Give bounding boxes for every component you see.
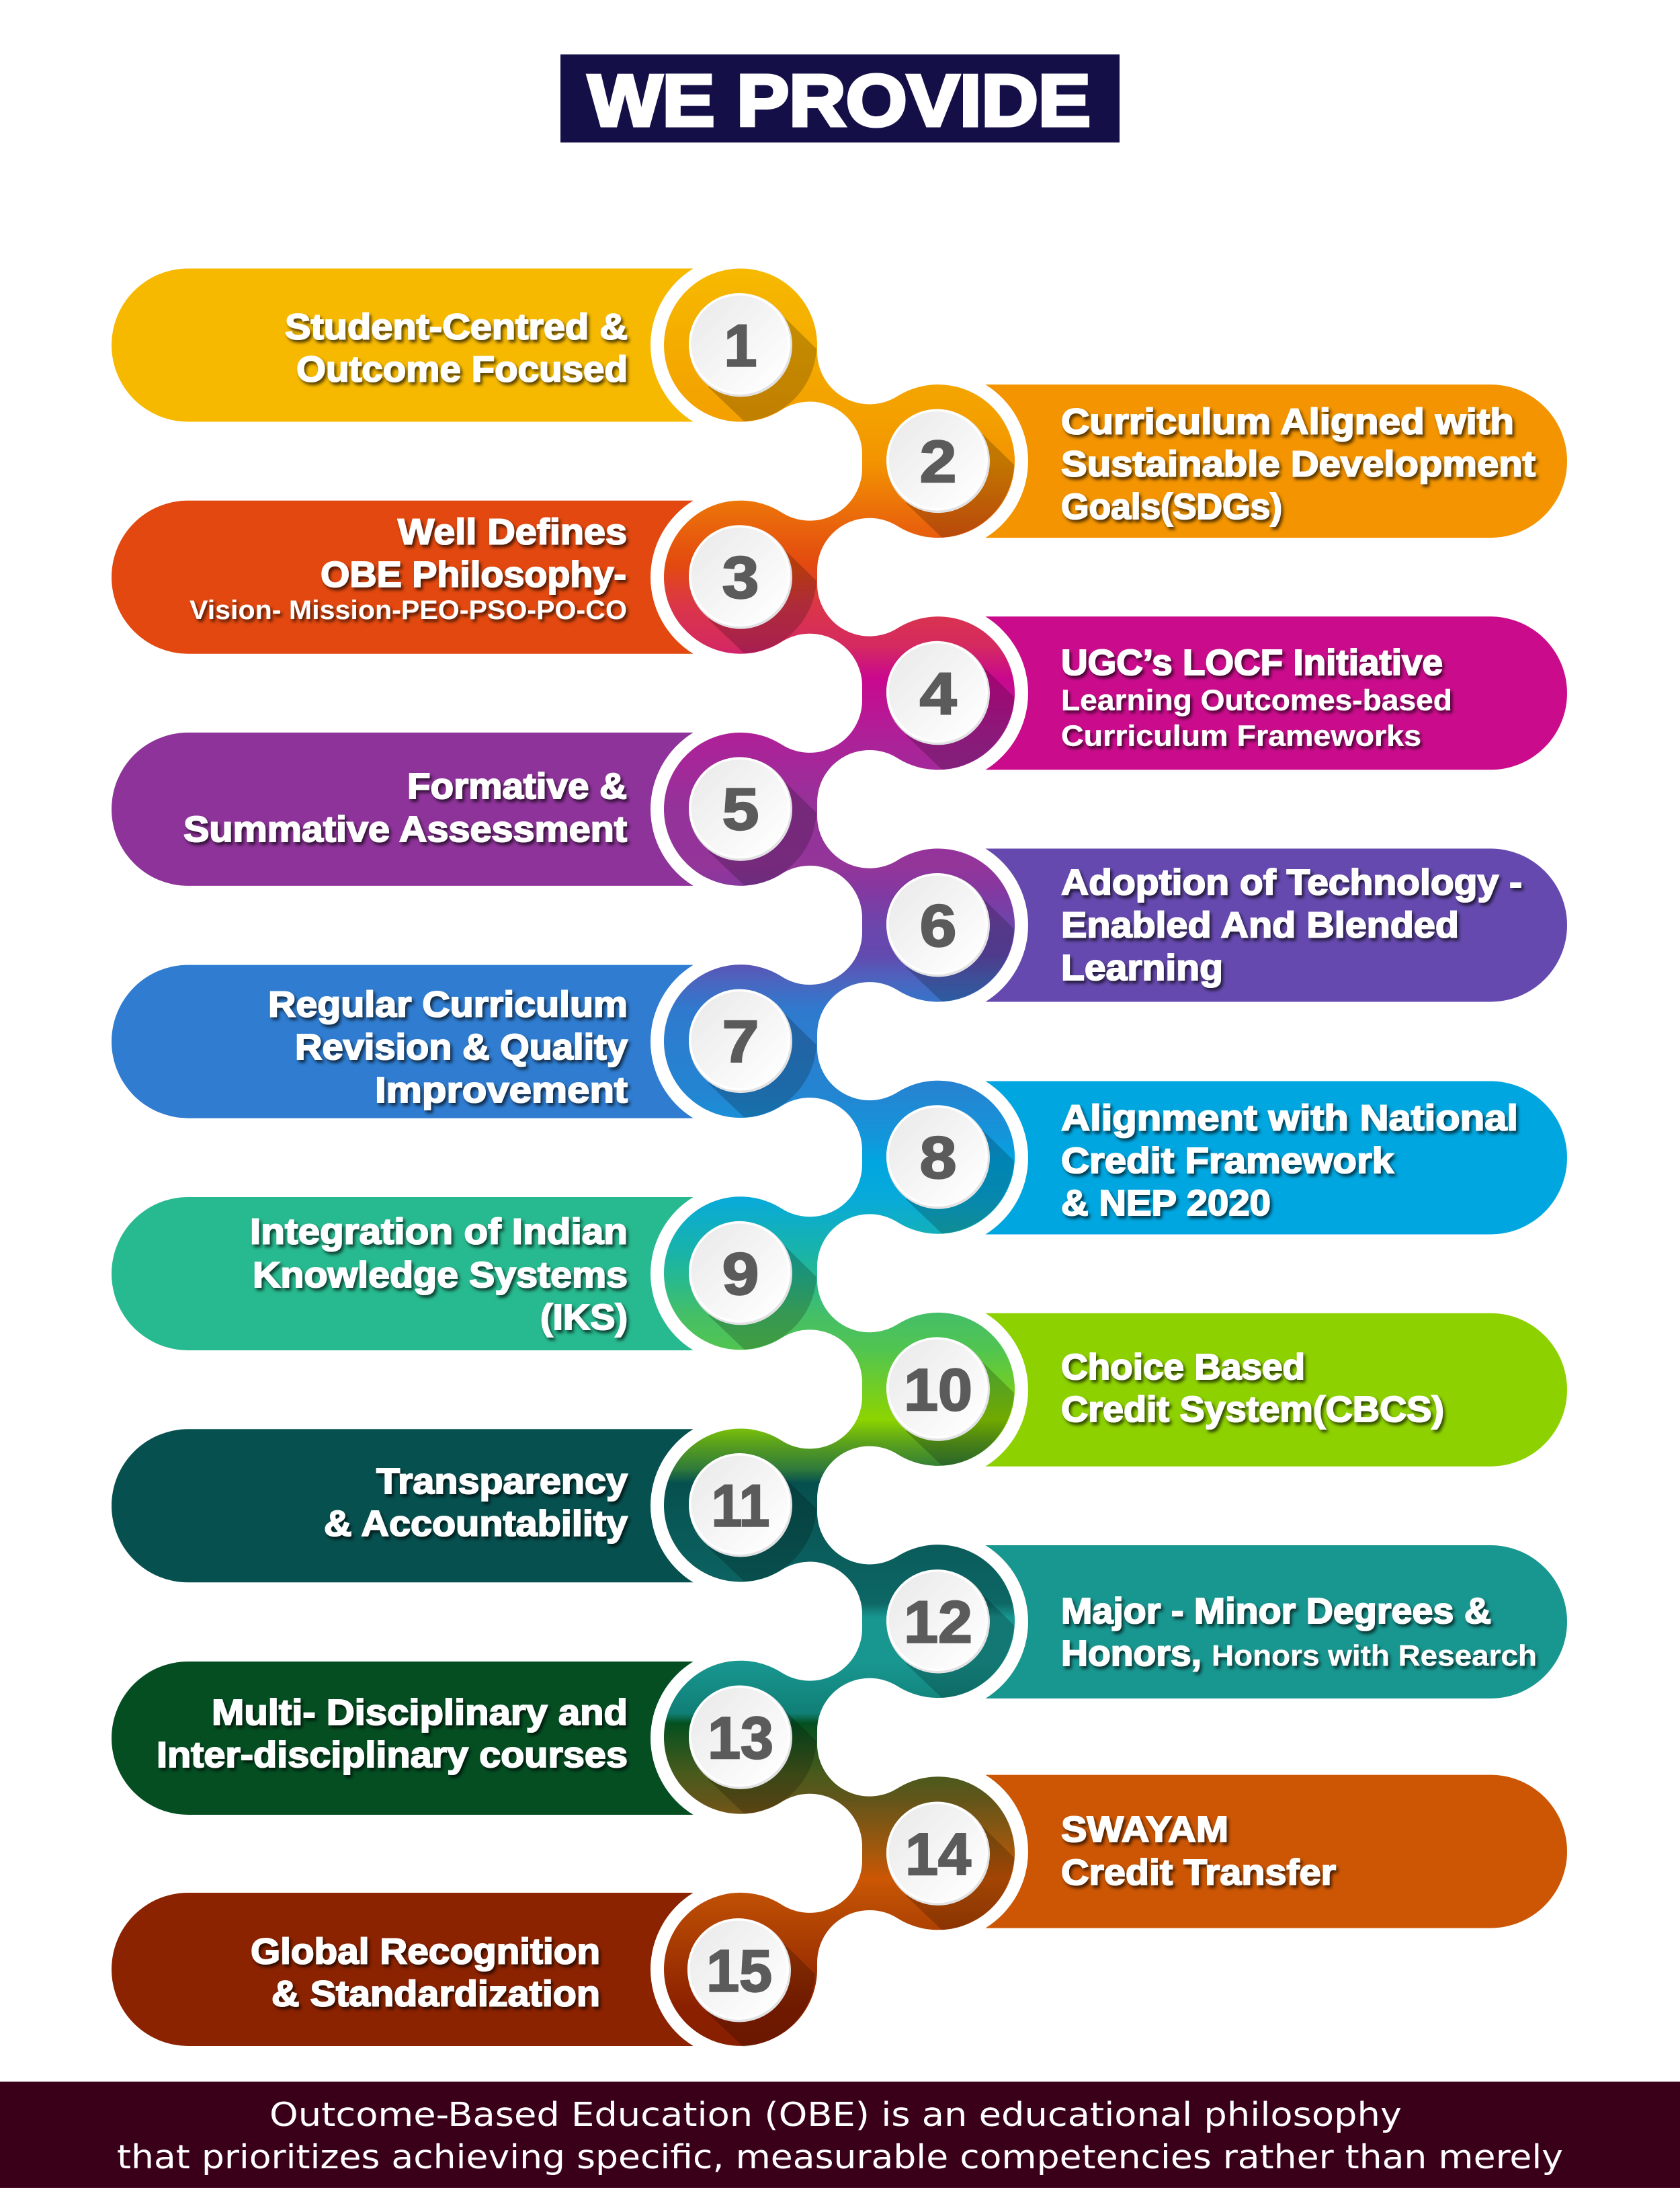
label 13: Multi- Disciplinary and: [212, 1692, 628, 1733]
item 15: [112, 1893, 815, 2047]
label 10: Choice Based: [1061, 1347, 1305, 1387]
badge 5: [689, 757, 816, 885]
label 8: & NEP 2020: [1061, 1183, 1271, 1223]
label 9: (IKS): [540, 1297, 628, 1338]
label 12: Major - Minor Degrees &: [1061, 1591, 1491, 1631]
badge 14: 14: [905, 1821, 971, 1887]
item 3: [112, 501, 816, 654]
label 1: Student-Centred &: [285, 306, 628, 347]
item 1: [112, 269, 816, 422]
label 9: Knowledge Systems: [253, 1255, 628, 1295]
badge 14: [886, 1801, 1014, 1930]
badge 8: [886, 1105, 1014, 1233]
badge 15: 15: [706, 1937, 772, 2004]
label 14: SWAYAM: [1061, 1809, 1228, 1850]
pill 10: [985, 1313, 1567, 1467]
footer banner: that prioritizes achieving specific, measurable competencies rather than merely: [117, 2138, 1563, 2176]
label 5: Formative &: [407, 766, 627, 807]
pill 9: [112, 1197, 694, 1350]
label 4: Learning Outcomes-based: [1061, 684, 1452, 716]
pill 2: [985, 384, 1567, 538]
label 3: [190, 512, 627, 625]
item 13: [112, 1662, 816, 1815]
footer banner: Outcome-Based Education (OBE) is an educational philosophy: [269, 2096, 1402, 2134]
label 15: [251, 1932, 600, 2014]
badge 4: 4: [920, 660, 956, 727]
label 2: Sustainable Development: [1061, 444, 1536, 484]
label 9: [250, 1211, 628, 1338]
badge 10: 10: [904, 1357, 972, 1424]
badge 9: [689, 1221, 816, 1350]
label 10: [1061, 1347, 1444, 1430]
label 2: [1061, 402, 1536, 527]
label 8: Alignment with National: [1061, 1098, 1518, 1139]
label 5: [183, 766, 627, 850]
label 7: Improvement: [375, 1070, 628, 1110]
label 5: Summative Assessment: [183, 809, 627, 850]
badge 11: [689, 1453, 816, 1582]
badge 6: [886, 873, 1014, 1001]
label 7: Regular Curriculum: [268, 984, 628, 1024]
label 6: [1061, 862, 1522, 988]
label 11: Transparency: [376, 1461, 628, 1502]
label 4: [1061, 643, 1452, 753]
pill 6: [985, 848, 1567, 1001]
label 12: Honors with Research: [1212, 1639, 1537, 1672]
pill 15: [112, 1893, 694, 2046]
pill 13: [112, 1662, 694, 1815]
item 7: [112, 965, 816, 1118]
label 6: Adoption of Technology -: [1061, 862, 1522, 903]
pill 11: [112, 1429, 694, 1582]
label 3: Well Defines: [398, 512, 627, 552]
badge 7: 7: [722, 1008, 759, 1075]
badge 9: 9: [722, 1240, 759, 1307]
label 3: Vision- Mission-PEO-PSO-PO-CO: [190, 596, 627, 625]
label 9: Integration of Indian: [250, 1211, 628, 1252]
item 5: [112, 733, 816, 886]
pill 8: [985, 1081, 1567, 1234]
label 6: Learning: [1061, 948, 1223, 988]
badge 3: 3: [722, 544, 759, 611]
badge 1: 1: [724, 312, 757, 379]
badge 4: [886, 641, 1014, 770]
badge 3: [689, 525, 816, 653]
label 14: Credit Transfer: [1061, 1852, 1336, 1893]
item 6: [886, 848, 1567, 1001]
badge 2: 2: [920, 428, 956, 495]
label 4: Curriculum Frameworks: [1061, 719, 1421, 753]
badge 11: 11: [712, 1473, 769, 1539]
label 1: [285, 306, 628, 390]
badge 13: [689, 1686, 816, 1813]
badge 8: 8: [920, 1124, 956, 1191]
label 13: [157, 1692, 628, 1775]
badge 10: [886, 1337, 1014, 1465]
badge 1: [689, 293, 816, 421]
label 1: Outcome Focused: [296, 350, 628, 390]
label 11: [324, 1461, 628, 1544]
badge 13: 13: [708, 1705, 773, 1771]
badge 2: [886, 409, 1014, 538]
label 13: Inter-disciplinary courses: [157, 1735, 628, 1775]
item 8: [886, 1081, 1567, 1234]
label 12: [1061, 1591, 1537, 1674]
item 12: [886, 1545, 1567, 1698]
label 12: Honors,: [1061, 1633, 1202, 1674]
title banner: WE PROVIDE: [588, 60, 1091, 142]
pill 14: [985, 1775, 1567, 1928]
label 11: & Accountability: [324, 1504, 628, 1544]
item 10: [886, 1313, 1567, 1467]
label 8: Credit Framework: [1061, 1141, 1394, 1181]
label 8: [1061, 1098, 1518, 1223]
badge 15: [687, 1918, 815, 2047]
label 3: OBE Philosophy-: [321, 555, 626, 595]
item 9: [112, 1197, 816, 1350]
footer banner: [0, 2082, 1680, 2188]
label 7: Revision & Quality: [295, 1027, 628, 1067]
badge 7: [689, 989, 816, 1118]
item 14: [886, 1775, 1567, 1930]
pill 7: [112, 965, 694, 1118]
label 7: [268, 984, 628, 1110]
pill 5: [112, 733, 694, 886]
label 14: [1061, 1809, 1336, 1893]
item 4: [886, 616, 1567, 770]
item 2: [886, 384, 1567, 538]
pill 4: [985, 616, 1567, 770]
pill 1: [112, 269, 694, 422]
badge 12: 12: [904, 1590, 972, 1655]
label 2: Goals(SDGs): [1061, 487, 1282, 527]
label 6: Enabled And Blended: [1061, 905, 1459, 945]
connected ribbon chain: [664, 269, 1015, 2046]
badge 12: [886, 1569, 1014, 1698]
badge 6: 6: [920, 892, 956, 958]
item 11: [112, 1429, 816, 1582]
pill 3: [112, 501, 694, 654]
label 15: & Standardization: [271, 1973, 600, 2014]
label 10: Credit System(CBCS): [1061, 1389, 1444, 1430]
label 2: Curriculum Aligned with: [1061, 402, 1514, 442]
badge 5: 5: [722, 776, 759, 842]
label 15: Global Recognition: [251, 1932, 600, 1972]
pill 12: [985, 1545, 1567, 1698]
label 4: UGC’s LOCF Initiative: [1061, 643, 1443, 683]
